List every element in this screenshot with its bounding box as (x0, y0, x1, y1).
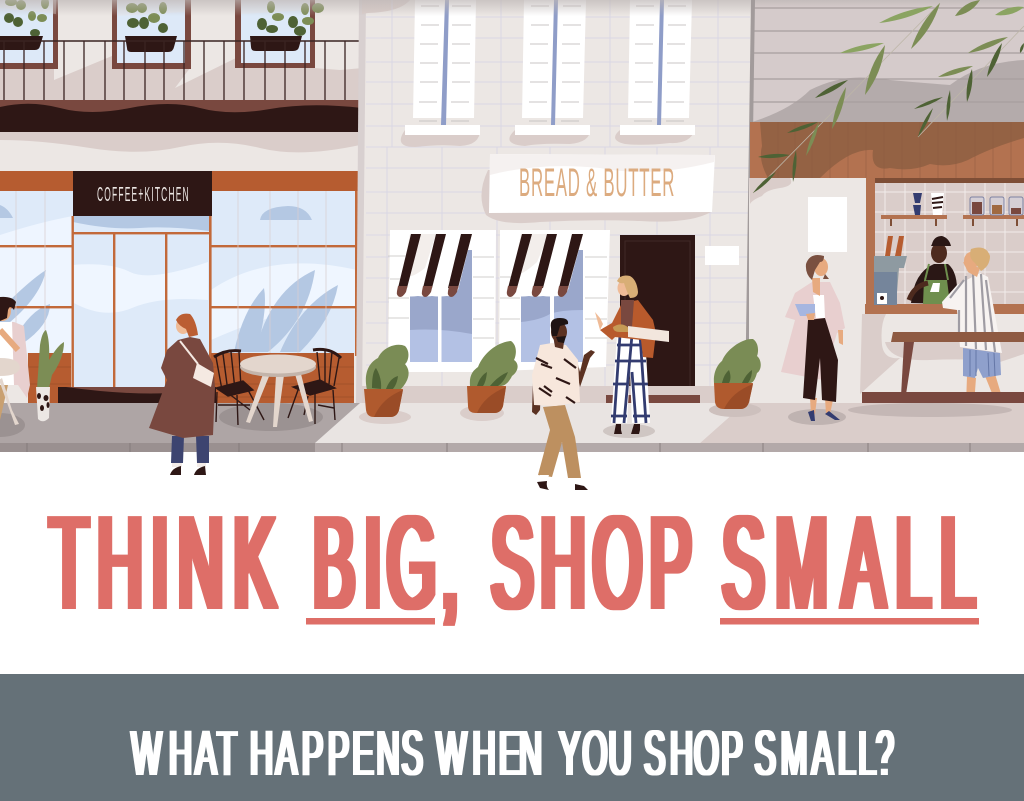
counter table (891, 332, 1024, 414)
plant right (714, 339, 761, 409)
barista (909, 236, 957, 304)
man walking (532, 318, 595, 490)
plant left (364, 345, 409, 417)
cafe sign (73, 171, 212, 216)
window plant shadows (0, 205, 338, 352)
upper windows with shutters (401, 0, 695, 147)
patterned vase plant (36, 330, 64, 421)
upper windows with planters (0, 0, 324, 69)
subtitle banner (0, 674, 1024, 801)
bakery door (606, 235, 739, 403)
plant middle (467, 341, 518, 413)
coffee machine (874, 236, 907, 305)
street scene illustration (0, 0, 1024, 490)
building: coffee counter (745, 0, 1024, 404)
storefront windows and door (0, 171, 359, 403)
title: THINK BIG, SHOP SMALL (50, 488, 975, 636)
balcony railing (0, 41, 363, 100)
round table (240, 354, 316, 427)
building: bread and butter bakery (0, 0, 752, 404)
woman with tablet (781, 255, 845, 421)
bakery sign (481, 154, 715, 223)
lower window with awning, left (388, 230, 496, 372)
shelves with cups and jars (881, 193, 1024, 226)
cafe sign: COFFEE+KITCHEN (97, 184, 190, 206)
lower window with awning, right (499, 230, 610, 371)
cafe table and chairs (214, 349, 341, 427)
subtitle banner: WHAT HAPPENS WHEN YOU SHOP SMALL? (131, 717, 894, 789)
building: coffee and kitchen cafe (0, 0, 364, 403)
bakery sign: BREAD & BUTTER (519, 161, 675, 205)
woman with baguette (595, 276, 669, 434)
woman in brown coat (149, 314, 215, 475)
left chair (214, 351, 264, 425)
balcony base (0, 100, 362, 152)
service window and counter (860, 178, 1024, 418)
seated man and small table (0, 297, 30, 425)
potted plants (364, 339, 761, 417)
pavement (0, 386, 1024, 452)
right chair (288, 349, 341, 424)
hanging olive branches (753, 0, 1024, 193)
customer in striped shirt (942, 248, 1009, 418)
